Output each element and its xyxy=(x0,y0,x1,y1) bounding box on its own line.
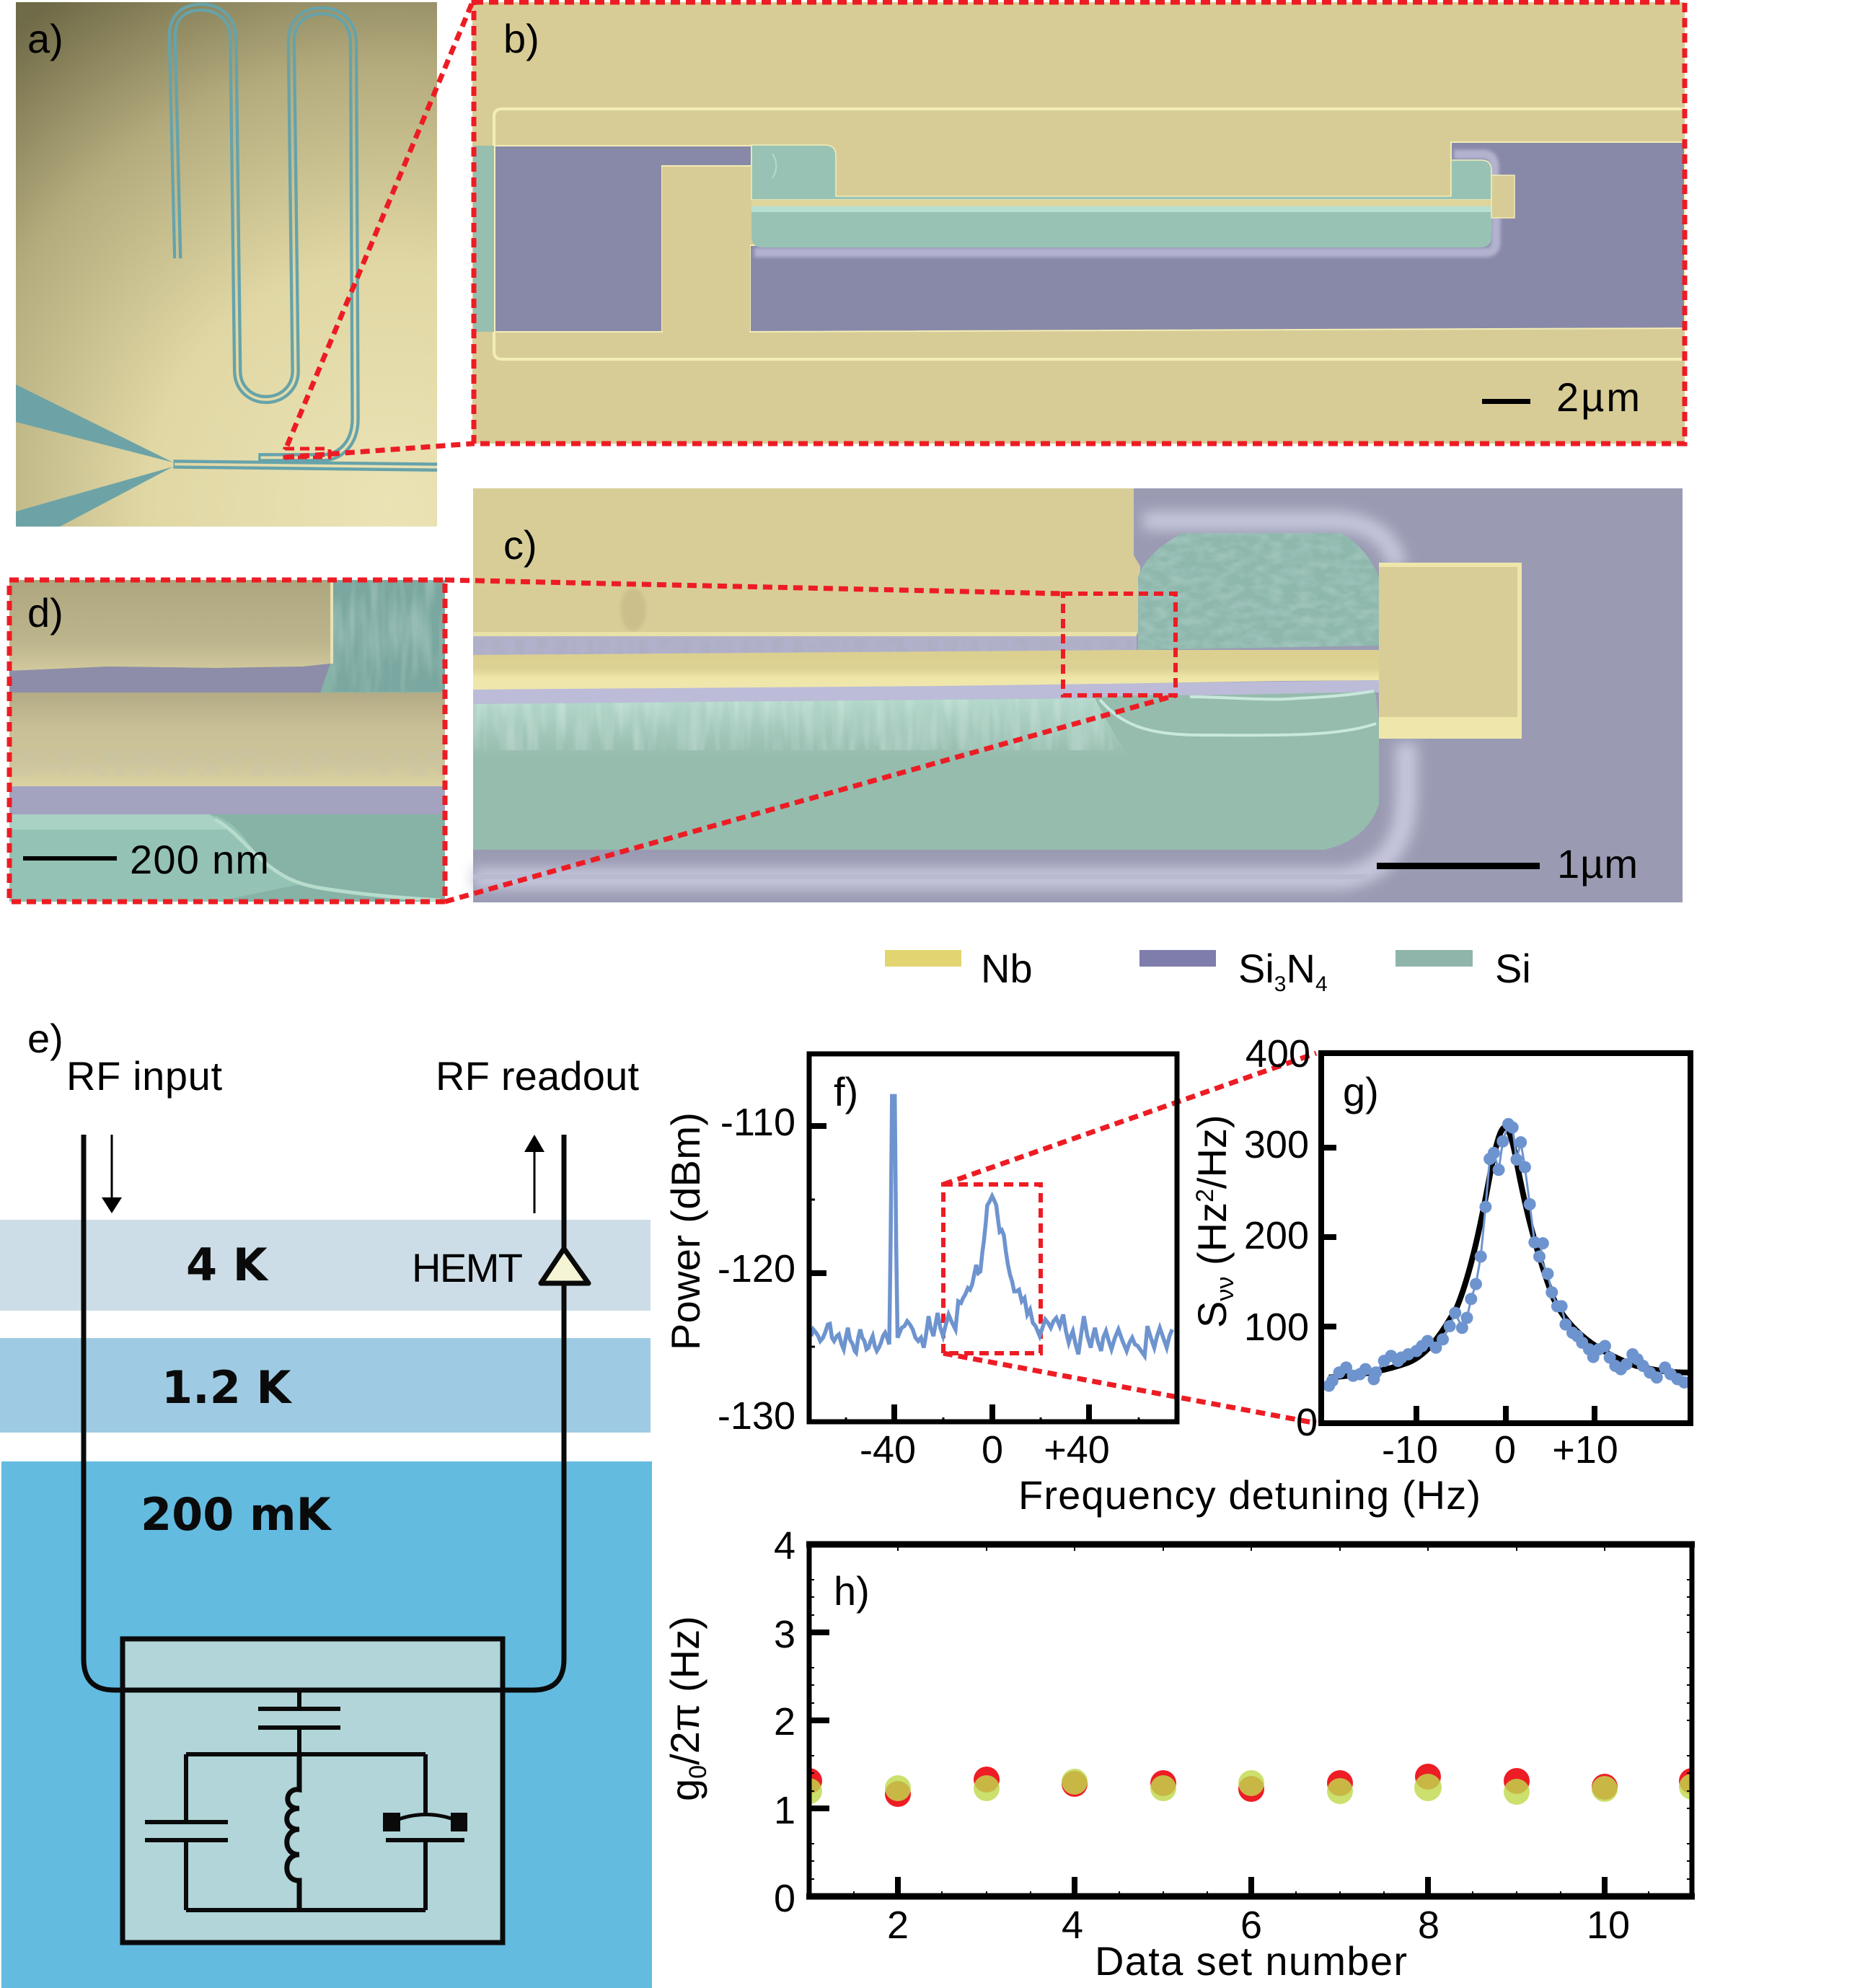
legend: Nb xyxy=(981,946,1033,991)
panel f: power spectrum xyxy=(663,1054,1177,1472)
Si beam xyxy=(473,692,1379,850)
axis labels f: +40 xyxy=(1044,1428,1110,1472)
Nb strip xyxy=(473,650,1385,690)
axis labels h xyxy=(662,1524,1630,1984)
Nb top xyxy=(9,580,333,671)
ticks g xyxy=(1321,1148,1595,1423)
halo xyxy=(473,521,1406,879)
meander resonator xyxy=(172,7,437,467)
shared x-axis title: Frequency detuning (Hz) xyxy=(1018,1472,1481,1518)
temperature stage 200 mK xyxy=(1,1461,652,1988)
axis labels h: h) xyxy=(834,1568,870,1614)
legend xyxy=(885,946,1531,996)
ticks f xyxy=(809,1126,1089,1422)
axis labels h: 1 xyxy=(774,1789,795,1832)
scale bar d xyxy=(23,837,269,882)
panel h: coupling rate xyxy=(662,1524,1705,1984)
frame h xyxy=(809,1544,1692,1896)
legend: Si xyxy=(1495,946,1531,991)
nitride band xyxy=(473,634,1137,656)
axis labels g: 400 xyxy=(1245,1032,1310,1076)
Nb column xyxy=(662,167,750,331)
axis labels f: f) xyxy=(834,1069,858,1114)
Si bar xyxy=(751,206,1491,247)
panel a: optical micrograph xyxy=(16,2,437,527)
axis labels g: +10 xyxy=(1552,1428,1618,1472)
axis labels g: /Hz) xyxy=(1189,1114,1235,1189)
axis labels h: 2 xyxy=(887,1904,909,1947)
label a: a) xyxy=(27,16,63,61)
axis labels h: 4 xyxy=(774,1524,795,1567)
axis labels h: 8 xyxy=(1418,1904,1439,1947)
zoom guides: red dashed frames and connectors xyxy=(9,2,1685,1423)
RF labels: HEMT xyxy=(412,1245,523,1290)
axis labels g: 200 xyxy=(1244,1214,1309,1257)
legend: 4 xyxy=(1315,972,1328,996)
temperature stage 4 K xyxy=(0,1220,651,1311)
axis labels h: /2π (Hz) xyxy=(662,1616,707,1765)
axis labels g: 300 xyxy=(1244,1123,1309,1166)
Si pads xyxy=(751,145,1491,200)
scale bar b: 2µm xyxy=(1556,374,1640,420)
legend: Si xyxy=(1238,946,1274,991)
temperature stage 4 K: 4 K xyxy=(186,1239,269,1291)
Nb end pad xyxy=(1491,175,1515,218)
nitride lower xyxy=(9,786,445,814)
axis labels g: 2 xyxy=(1191,1189,1219,1202)
RF labels: e) xyxy=(27,1016,63,1061)
axis labels f: -130 xyxy=(718,1394,795,1438)
scale bar b xyxy=(1482,374,1640,420)
temperature stage 200 mK: 200 mK xyxy=(141,1488,332,1541)
legend: 3 xyxy=(1274,972,1286,996)
label b: b) xyxy=(503,16,539,61)
axis labels f: -110 xyxy=(720,1101,795,1144)
temperature stage 1.2 K: 1.2 K xyxy=(162,1361,292,1414)
axis labels h: 3 xyxy=(774,1613,795,1656)
frame g xyxy=(1321,1053,1690,1423)
axis labels g: 0 xyxy=(1494,1428,1516,1472)
panel e: cryogenic circuit schematic xyxy=(0,1016,652,1988)
axis labels g: νν xyxy=(1212,1277,1239,1301)
ticks h xyxy=(809,1632,1605,1896)
axis labels g xyxy=(1189,1032,1618,1472)
arrow up xyxy=(524,1135,544,1213)
RF labels: RF readout xyxy=(436,1053,639,1099)
label d: d) xyxy=(27,590,63,635)
axis labels f: Power (dBm) xyxy=(663,1112,708,1350)
Si pad xyxy=(1138,533,1379,650)
LC resonator circuit xyxy=(145,1690,467,1910)
axis labels g: 100 xyxy=(1244,1306,1309,1349)
lower Si lit area xyxy=(9,814,299,902)
RF labels xyxy=(27,1016,639,1290)
device box xyxy=(123,1639,503,1943)
axis labels g: -10 xyxy=(1382,1428,1438,1472)
axis labels f xyxy=(663,1069,1110,1472)
axis labels g: S xyxy=(1189,1301,1235,1328)
axis labels h: g xyxy=(662,1779,707,1801)
Si top right xyxy=(332,580,445,692)
Nb strip xyxy=(751,200,1494,206)
panel d: SEM close up xyxy=(9,580,445,902)
axis labels h: 0 xyxy=(774,1877,795,1920)
axis labels h: 0 xyxy=(684,1765,712,1779)
scale bar d: 200 nm xyxy=(130,837,269,882)
arrow down xyxy=(102,1135,122,1213)
data points g xyxy=(1329,1124,1685,1386)
axis labels g: (Hz xyxy=(1189,1202,1235,1277)
panel c: SEM detail xyxy=(473,488,1683,902)
RF labels: RF input xyxy=(66,1053,222,1099)
axis labels h: 4 xyxy=(1062,1904,1083,1947)
silicon nitride regions xyxy=(495,146,751,332)
Nb pad xyxy=(1379,563,1522,739)
axis labels f: -120 xyxy=(718,1247,795,1290)
frame f xyxy=(809,1054,1177,1422)
Si ridge xyxy=(1100,691,1376,735)
Nb strip xyxy=(9,692,445,786)
scale bar c: 1µm xyxy=(1557,841,1638,887)
Nitride under strip xyxy=(473,680,1379,705)
label c: c) xyxy=(503,522,537,568)
trace f xyxy=(811,1096,1172,1356)
panel b: SEM overview xyxy=(472,2,1685,444)
nitride top xyxy=(9,664,330,693)
axis labels g: 0 xyxy=(1296,1401,1318,1444)
feedline xyxy=(84,1135,564,1690)
axis labels f: -40 xyxy=(860,1428,916,1472)
axis labels g: g) xyxy=(1343,1069,1379,1114)
lorentzian fit xyxy=(1329,1127,1688,1378)
data points h xyxy=(796,1764,1705,1807)
axis labels h: 6 xyxy=(1240,1904,1262,1947)
panel g: noise spectrum fit xyxy=(1189,1032,1690,1472)
legend: N xyxy=(1286,946,1315,991)
temperature stage 1.2 K xyxy=(0,1338,651,1433)
silicon strip left xyxy=(473,146,495,332)
axis labels h: Data set number xyxy=(1095,1938,1407,1984)
Si ring detail xyxy=(772,154,776,178)
scale bar c xyxy=(1377,841,1638,887)
axis labels h: 10 xyxy=(1587,1904,1630,1947)
halos xyxy=(754,154,1496,252)
Nb upper xyxy=(473,488,1140,634)
launch tapers xyxy=(16,384,173,527)
HEMT amplifier xyxy=(541,1249,588,1283)
axis labels f: 0 xyxy=(982,1428,1003,1472)
axis labels h: 2 xyxy=(774,1700,795,1743)
